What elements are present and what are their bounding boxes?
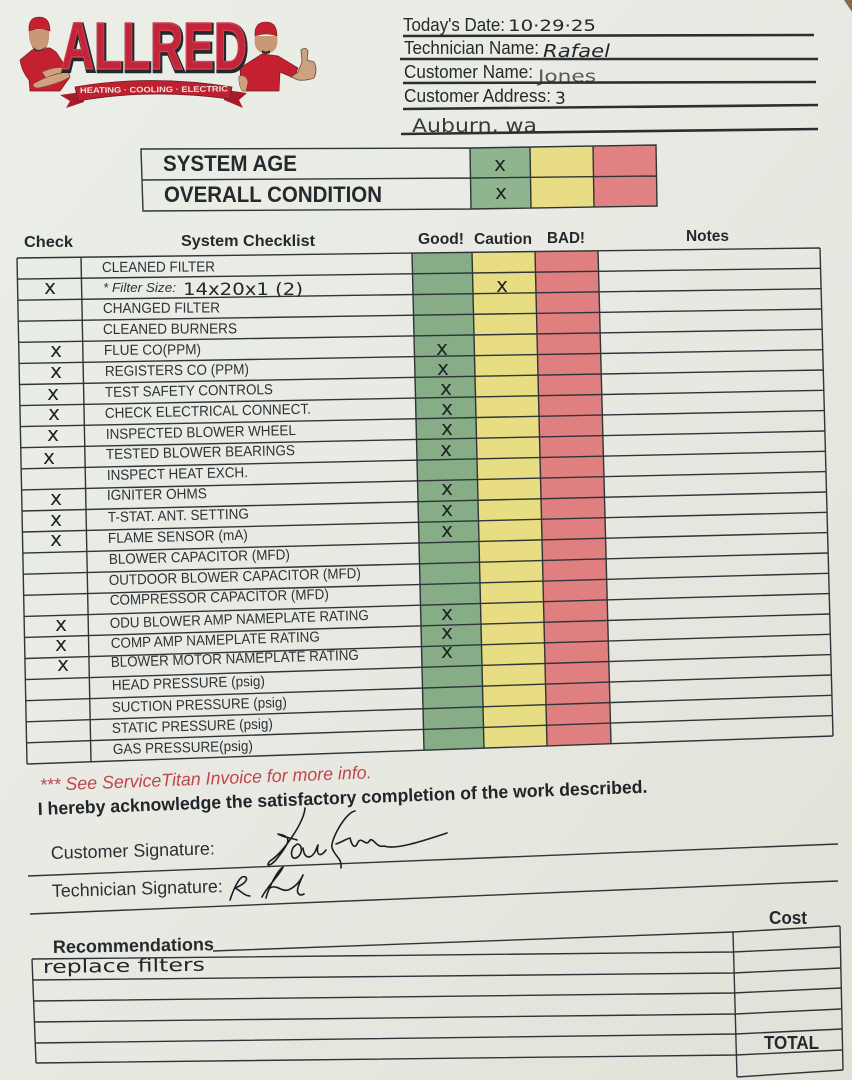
- good column marks: x: [436, 336, 448, 360]
- good column marks: x: [441, 601, 453, 625]
- heading: cost: Cost: [769, 908, 807, 928]
- good column marks: x: [441, 476, 453, 500]
- good column marks: x: [441, 396, 453, 420]
- check column marks: [43, 275, 69, 676]
- field: technician name: [400, 38, 818, 62]
- good column marks: x: [441, 639, 453, 663]
- check column marks: x: [57, 652, 69, 676]
- field: technician name: Rafael: [543, 41, 610, 62]
- check column marks: x: [43, 445, 55, 469]
- checklist item labels: STATIC PRESSURE (psig): [112, 717, 273, 737]
- check column marks: x: [48, 401, 60, 425]
- icon: left technician with crossed arms: [20, 17, 70, 91]
- logo ribbon banner: [60, 80, 247, 108]
- customer signature: [28, 808, 838, 876]
- handwritten recommendation: replace filters: [43, 955, 205, 978]
- checklist item labels: COMP AMP NAMEPLATE RATING: [111, 629, 320, 652]
- checklist item labels: OUTDOOR BLOWER CAPACITOR (MFD): [109, 566, 361, 589]
- checklist item labels: [102, 259, 369, 758]
- field: address line two: [401, 115, 818, 137]
- customer info header: [400, 15, 818, 137]
- checklist item labels: CHECK ELECTRICAL CONNECT.: [105, 402, 311, 422]
- field: customer name: Jones: [537, 67, 596, 87]
- heading: check: Check: [24, 234, 73, 251]
- checklist item labels: REGISTERS CO (PPM): [105, 362, 249, 380]
- field: today's date: [403, 15, 814, 36]
- checklist item labels: CHANGED FILTER: [103, 300, 220, 317]
- check column marks: x: [47, 422, 59, 446]
- icon: right technician with thumbs up: [239, 22, 316, 91]
- table grid: [32, 926, 843, 1077]
- checklist item labels: BLOWER CAPACITOR (MFD): [109, 547, 290, 568]
- heading: system checklist: System Checklist: [181, 233, 316, 250]
- rating swatches: [470, 145, 657, 209]
- checklist item labels: T-STAT. ANT. SETTING: [108, 507, 249, 526]
- checklist column headings: [24, 228, 729, 251]
- checklist item labels: COMPRESSOR CAPACITOR (MFD): [110, 587, 329, 609]
- checklist item labels: ODU BLOWER AMP NAMEPLATE RATING: [110, 608, 369, 632]
- checklist item labels: INSPECTED BLOWER WHEEL: [106, 423, 296, 443]
- good / caution / bad colour columns: [412, 251, 611, 750]
- field: customer address: [403, 86, 818, 109]
- checklist item labels: FLUE CO(PPM): [104, 342, 201, 359]
- heading: notes: Notes: [686, 228, 729, 245]
- good column marks: [436, 336, 453, 663]
- check column marks: x: [55, 612, 67, 636]
- checklist item labels: IGNITER OHMS: [107, 486, 207, 504]
- check column marks: x: [50, 486, 62, 510]
- field: customer name: Customer Name:: [404, 62, 533, 82]
- panel: recommendations and cost table: [32, 908, 843, 1077]
- check column marks: x: [50, 507, 62, 531]
- technician signature: [30, 867, 838, 914]
- technician signature: Technician Signature:: [52, 876, 223, 901]
- checklist item labels: TESTED BLOWER BEARINGS: [106, 443, 295, 463]
- customer signature: Customer Signature:: [51, 838, 215, 863]
- label: overall condition: OVERALL CONDITION: [164, 182, 382, 207]
- logo wordmark: ALLRED: [61, 9, 247, 84]
- panel: system checklist table: [17, 248, 833, 764]
- mark: system age good: x: [494, 152, 506, 176]
- good column marks: x: [441, 620, 453, 644]
- good column marks: x: [441, 518, 453, 542]
- logo: Allred Heating Cooling Electric: [20, 9, 316, 108]
- good column marks: x: [441, 497, 453, 521]
- checklist item labels: SUCTION PRESSURE (psig): [112, 695, 287, 716]
- good column marks: x: [440, 437, 452, 461]
- table grid: [17, 248, 833, 764]
- heading: bad: BAD!: [547, 230, 585, 247]
- field: address line two: Auburn, wa: [412, 115, 537, 137]
- field: technician name: Technician Name:: [404, 38, 539, 58]
- panel: system age and overall condition: [141, 145, 657, 211]
- checklist item labels: INSPECT HEAT EXCH.: [107, 465, 248, 484]
- field: today's date: 10·29·25: [508, 16, 596, 35]
- label: system age: SYSTEM AGE: [163, 151, 297, 176]
- check column marks: x: [50, 359, 62, 383]
- field: customer address: 3: [555, 89, 566, 109]
- acknowledgement statement: I hereby acknowledge the satisfactory completion of the work described.: [37, 777, 648, 819]
- field: today's date: Today's Date:: [403, 15, 505, 35]
- note: see ServiceTitan invoice: *** See ServiceTitan Invoice for more info.: [39, 762, 372, 795]
- check column marks: x: [50, 338, 62, 362]
- check column marks: x: [50, 527, 62, 551]
- check column marks: x: [55, 632, 67, 656]
- checklist item labels: CLEANED BURNERS: [103, 321, 237, 338]
- checklist item labels: 14x20x1 (2): [183, 280, 303, 300]
- field: customer address: Customer Address:: [404, 86, 551, 106]
- check column marks: x: [44, 275, 56, 299]
- checklist item labels: BLOWER MOTOR NAMEPLATE RATING: [111, 648, 359, 671]
- heading: recommendations: Recommendations: [53, 934, 214, 957]
- mark: overall condition good: x: [495, 180, 507, 204]
- checklist item labels: TEST SAFETY CONTROLS: [105, 382, 273, 401]
- logo wordmark: [61, 9, 248, 86]
- checklist item labels: CLEANED FILTER: [102, 259, 215, 276]
- checklist item labels: FLAME SENSOR (mA): [108, 528, 248, 547]
- heading: good: Good!: [418, 231, 464, 248]
- table grid: [141, 145, 657, 211]
- field: customer name: [403, 62, 816, 87]
- logo ribbon banner: HEATING · COOLING · ELECTRIC: [80, 84, 228, 95]
- checklist item labels: GAS PRESSURE(psig): [113, 739, 253, 758]
- good column marks: x: [437, 356, 449, 380]
- checklist item labels: HEAD PRESSURE (psig): [112, 674, 265, 694]
- checklist item labels: * Filter Size:: [103, 280, 176, 295]
- good column marks: x: [441, 416, 453, 440]
- signature block: [28, 808, 838, 914]
- check column marks: x: [47, 381, 59, 405]
- label: total: TOTAL: [764, 1033, 819, 1053]
- good column marks: x: [440, 376, 452, 400]
- logo wordmark: ALLRED: [62, 11, 248, 86]
- caution column mark: x: [496, 273, 508, 297]
- heading: caution: Caution: [474, 231, 532, 248]
